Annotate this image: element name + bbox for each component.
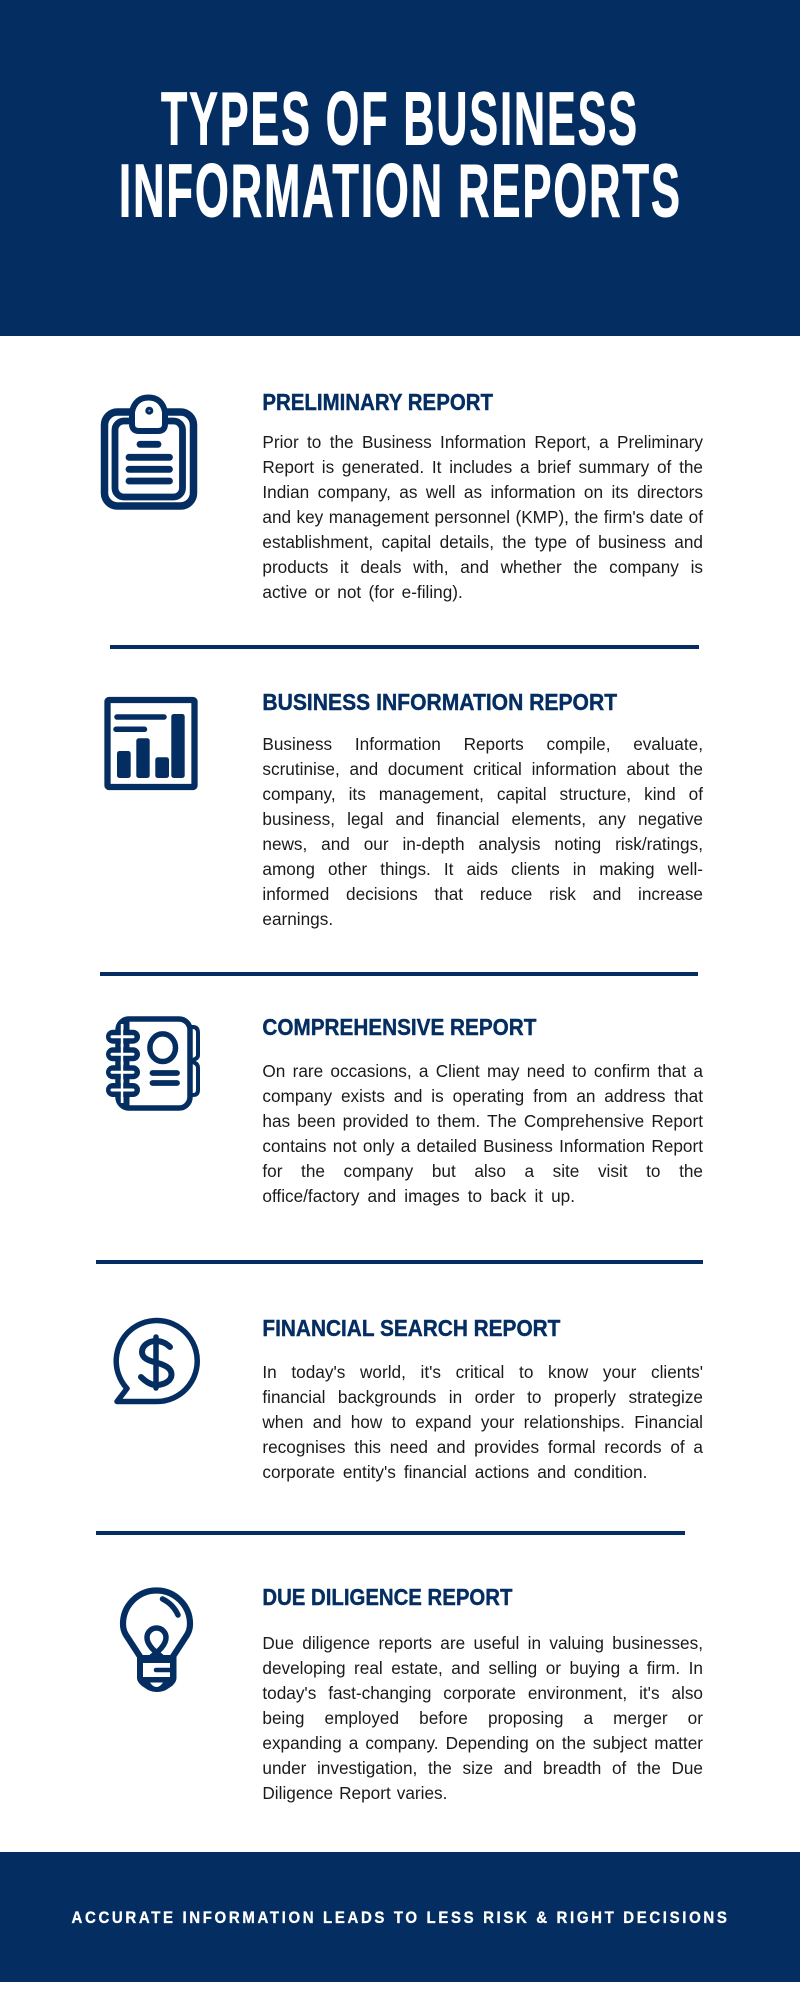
text block: products it deals with, and whether the company is bbox=[262, 557, 703, 577]
text block: among other things. It aids clients in making well- bbox=[262, 859, 703, 879]
text block: and key management personnel (KMP), the firm's date of bbox=[262, 507, 703, 527]
text block: On rare occasions, a Client may need to confirm that a bbox=[262, 1061, 703, 1081]
text block: has been provided to them. The Comprehensive Report bbox=[262, 1111, 703, 1131]
text block: scrutinise, and document critical information about the bbox=[262, 759, 703, 779]
panel: comprehensive report bbox=[106, 1014, 703, 1206]
icon: clipboard bbox=[100, 394, 198, 510]
text block: Prior to the Business Information Report, a Preliminary bbox=[262, 432, 703, 452]
icon: light bulb bbox=[120, 1587, 194, 1692]
heading: FINANCIAL SEARCH REPORT bbox=[262, 1315, 560, 1341]
text block: news, and our in-depth analysis noting risk/ratings, bbox=[262, 834, 703, 854]
footer tagline: ACCURATE INFORMATION LEADS TO LESS RISK & RIGHT DECISIONS bbox=[72, 1908, 730, 1927]
text block bbox=[262, 734, 704, 929]
text block: financial backgrounds in order to properly strategize bbox=[262, 1387, 703, 1407]
text block: when and how to expand your relationships. Financial bbox=[262, 1412, 703, 1432]
heading: BUSINESS INFORMATION REPORT bbox=[262, 689, 617, 715]
text block: earnings. bbox=[262, 909, 333, 929]
text block: under investigation, the size and breadth of the Due bbox=[262, 1758, 703, 1778]
text block: expanding a company. Depending on the subject matter bbox=[262, 1733, 703, 1753]
text block: contains not only a detailed Business Information Report bbox=[262, 1136, 703, 1156]
text block: active or not (for e-filing). bbox=[262, 582, 463, 602]
heading: DUE DILIGENCE REPORT bbox=[262, 1584, 512, 1610]
heading: COMPREHENSIVE REPORT bbox=[262, 1014, 536, 1040]
text block: establishment, capital details, the type of business and bbox=[262, 532, 703, 552]
text block: Report is generated. It includes a brief summary of the bbox=[262, 457, 703, 477]
text block: corporate entity's financial actions and condition. bbox=[262, 1462, 647, 1482]
text block: company exists and is operating from an address that bbox=[262, 1086, 703, 1106]
icon: bar chart report bbox=[104, 696, 198, 790]
text block: Indian company, as well as information on its directors bbox=[262, 482, 703, 502]
text block: recognises this need and provides formal records of a bbox=[262, 1437, 703, 1457]
text block: Diligence Report varies. bbox=[262, 1783, 447, 1803]
panel: due diligence report bbox=[120, 1584, 703, 1803]
text block: being employed before proposing a merger or bbox=[262, 1708, 703, 1728]
panel: financial search report bbox=[113, 1315, 703, 1482]
title bbox=[119, 77, 682, 233]
header banner bbox=[0, 0, 800, 336]
text block bbox=[262, 1633, 703, 1803]
icon: spiral notebook bbox=[106, 1016, 200, 1111]
icon: dollar speech bubble bbox=[113, 1318, 200, 1404]
text block: Business Information Reports compile, evaluate, bbox=[262, 734, 703, 754]
text block bbox=[262, 1061, 703, 1206]
text block: Due diligence reports are useful in valuing businesses, bbox=[262, 1633, 703, 1653]
text block: today's fast-changing corporate environment, it's also bbox=[262, 1683, 703, 1703]
panel: business information report bbox=[104, 689, 704, 929]
text block bbox=[262, 432, 704, 602]
text block: In today's world, it's critical to know your clients' bbox=[262, 1362, 703, 1382]
text block: company, its management, capital structure, kind of bbox=[262, 784, 703, 804]
text block: office/factory and images to back it up. bbox=[262, 1186, 575, 1206]
text block: developing real estate, and selling or buying a firm. In bbox=[262, 1658, 703, 1678]
text block bbox=[262, 1362, 703, 1482]
footer banner bbox=[0, 1852, 800, 1982]
text block: informed decisions that reduce risk and increase bbox=[262, 884, 703, 904]
text block: for the company but also a site visit to the bbox=[262, 1161, 703, 1181]
heading: PRELIMINARY REPORT bbox=[262, 389, 493, 415]
text block: business, legal and financial elements, any negative bbox=[262, 809, 703, 829]
panel: preliminary report bbox=[100, 389, 704, 602]
